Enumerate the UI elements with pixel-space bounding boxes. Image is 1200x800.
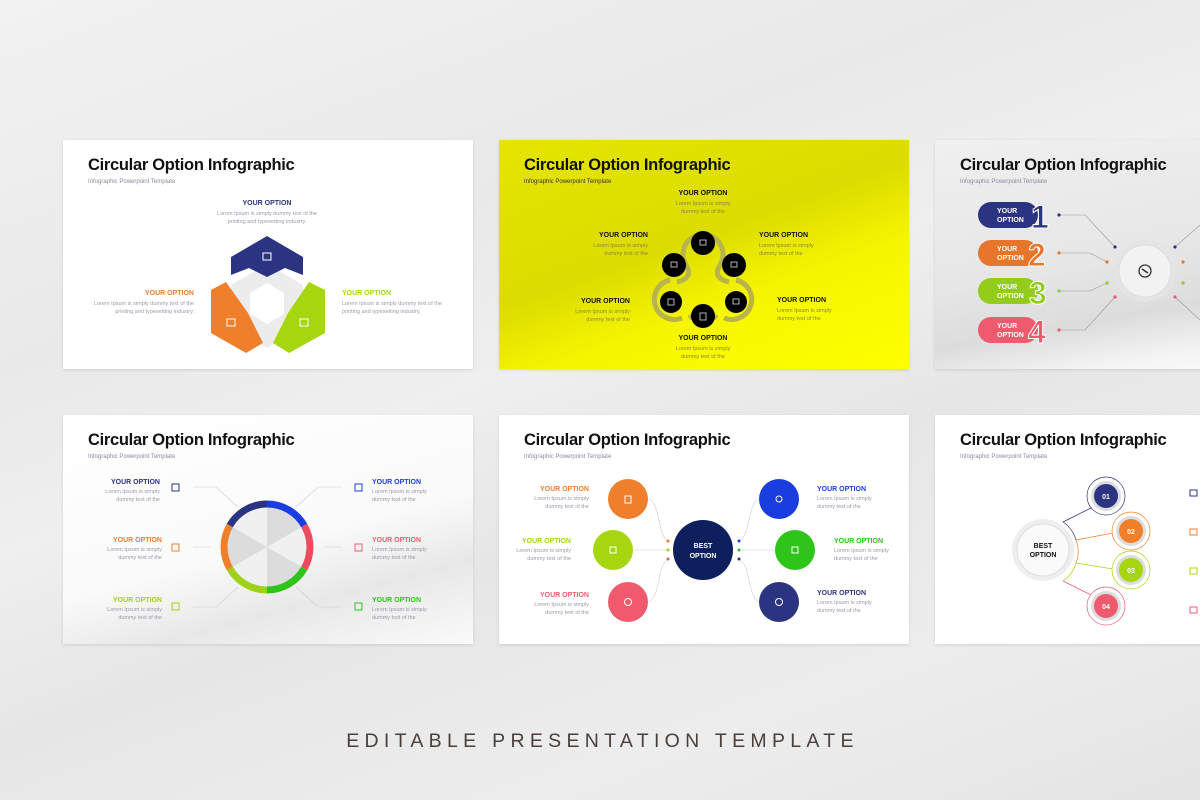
left labels: YOUR OPTION bbox=[111, 479, 160, 486]
left labels: Lorem Ipsum is simply bbox=[516, 548, 571, 554]
title: Circular Option Infographic bbox=[524, 156, 731, 174]
right labels: Lorem Ipsum is simply bbox=[834, 548, 889, 554]
left labels: dummy text of the bbox=[116, 497, 160, 503]
title bbox=[88, 431, 295, 460]
slide 6: numbered circles (cut off) bbox=[935, 415, 1200, 644]
title: Infographic Powerpoint Template bbox=[88, 179, 176, 185]
title bbox=[960, 156, 1167, 185]
option pills: OPTION bbox=[997, 217, 1024, 224]
option pills: 3 bbox=[1029, 275, 1047, 311]
option pills: 1 bbox=[1031, 199, 1049, 235]
right labels: YOUR OPTION bbox=[834, 538, 883, 545]
right labels: YOUR OPTION bbox=[817, 486, 866, 493]
center circle: BEST bbox=[694, 543, 713, 550]
dots bbox=[1057, 213, 1185, 332]
slide 1: hexagon options bbox=[63, 140, 473, 369]
connectors bbox=[1063, 507, 1113, 596]
connectors bbox=[193, 487, 341, 607]
left labels: YOUR OPTION bbox=[113, 537, 162, 544]
right labels: YOUR OPTION bbox=[817, 590, 866, 597]
right labels: dummy text of the bbox=[372, 615, 416, 621]
left option text: printing and typesetting industry. bbox=[115, 309, 194, 315]
option pills: YOUR bbox=[997, 246, 1017, 253]
title: Circular Option Infographic bbox=[960, 156, 1167, 174]
left labels bbox=[516, 486, 589, 616]
right option text bbox=[342, 290, 442, 315]
left labels: Lorem Ipsum is simply bbox=[105, 489, 160, 495]
option texts: dummy text of the bbox=[681, 209, 725, 215]
hexagon diagram bbox=[211, 236, 325, 353]
slide 3: numbered options (cut off) bbox=[935, 140, 1200, 369]
left labels: dummy text of the bbox=[545, 610, 589, 616]
right labels: Lorem Ipsum is simply bbox=[372, 547, 427, 553]
title: Circular Option Infographic bbox=[960, 431, 1167, 449]
top option text bbox=[217, 200, 317, 225]
title: Infographic Powerpoint Template bbox=[960, 454, 1048, 460]
title bbox=[960, 431, 1167, 460]
right labels: Lorem Ipsum is simply bbox=[372, 489, 427, 495]
left labels: YOUR OPTION bbox=[522, 538, 571, 545]
option texts: Lorem Ipsum is simply bbox=[777, 308, 832, 314]
left labels: dummy text of the bbox=[527, 556, 571, 562]
left labels: dummy text of the bbox=[118, 615, 162, 621]
option texts: Lorem Ipsum is simply bbox=[759, 243, 814, 249]
option pills: 4 bbox=[1028, 314, 1046, 350]
left labels: YOUR OPTION bbox=[113, 597, 162, 604]
option texts: dummy text of the bbox=[604, 251, 648, 257]
option texts: YOUR OPTION bbox=[599, 232, 648, 239]
option pills: 2 bbox=[1028, 237, 1046, 273]
title: Circular Option Infographic bbox=[88, 431, 295, 449]
right labels: dummy text of the bbox=[834, 556, 878, 562]
option texts: Lorem Ipsum is simply bbox=[593, 243, 648, 249]
option pills bbox=[978, 199, 1049, 350]
option pills: OPTION bbox=[997, 293, 1024, 300]
title: Infographic Powerpoint Template bbox=[960, 179, 1048, 185]
right labels: dummy text of the bbox=[817, 504, 861, 510]
slide 5: best option mind map bbox=[499, 415, 909, 644]
title: Circular Option Infographic bbox=[88, 156, 295, 174]
left labels: Lorem Ipsum is simply bbox=[107, 547, 162, 553]
right option text: Lorem Ipsum is simply dummy text of the bbox=[342, 301, 442, 307]
dots bbox=[666, 540, 740, 560]
right labels: Lorem Ipsum is simply bbox=[817, 496, 872, 502]
right labels bbox=[817, 486, 889, 614]
right labels: YOUR OPTION bbox=[372, 537, 421, 544]
right labels: dummy text of the bbox=[372, 497, 416, 503]
trefoil diagram bbox=[654, 231, 752, 328]
left labels: YOUR OPTION bbox=[540, 592, 589, 599]
right labels: Lorem Ipsum is simply bbox=[372, 607, 427, 613]
option texts: dummy text of the bbox=[759, 251, 803, 257]
option texts: YOUR OPTION bbox=[759, 232, 808, 239]
title: Circular Option Infographic bbox=[524, 431, 731, 449]
option pills: YOUR bbox=[997, 284, 1017, 291]
best option circle bbox=[1012, 519, 1074, 581]
title: Infographic Powerpoint Template bbox=[88, 454, 176, 460]
numbered circles: 04 bbox=[1102, 604, 1110, 611]
title bbox=[524, 431, 731, 460]
footer caption: EDITABLE PRESENTATION TEMPLATE bbox=[346, 730, 859, 752]
right labels: YOUR OPTION bbox=[372, 479, 421, 486]
title: Infographic Powerpoint Template bbox=[524, 454, 612, 460]
title: Infographic Powerpoint Template bbox=[524, 179, 612, 185]
right labels: dummy text of the bbox=[817, 608, 861, 614]
option texts bbox=[575, 190, 832, 360]
option pills: OPTION bbox=[997, 332, 1024, 339]
option texts: Lorem Ipsum is simply bbox=[676, 201, 731, 207]
option texts: YOUR OPTION bbox=[678, 190, 728, 197]
left option text bbox=[94, 290, 194, 315]
right labels: YOUR OPTION bbox=[372, 597, 421, 604]
left option text: YOUR OPTION bbox=[145, 290, 194, 297]
right option text: YOUR OPTION bbox=[342, 290, 391, 297]
best option circle: OPTION bbox=[1030, 552, 1056, 559]
left labels: dummy text of the bbox=[545, 504, 589, 510]
numbered circles: 02 bbox=[1127, 529, 1135, 536]
slide 4: ring options bbox=[63, 415, 473, 644]
right labels: Lorem Ipsum is simply bbox=[817, 600, 872, 606]
option circles bbox=[593, 479, 815, 622]
center circle: OPTION bbox=[690, 553, 716, 560]
option texts: YOUR OPTION bbox=[581, 298, 630, 305]
option pills: YOUR bbox=[997, 208, 1017, 215]
option pills: YOUR bbox=[997, 323, 1017, 330]
right labels bbox=[372, 479, 427, 621]
numbered circles bbox=[1087, 477, 1150, 625]
numbered circles: 03 bbox=[1127, 568, 1135, 575]
option texts: dummy text of the bbox=[777, 316, 821, 322]
left labels: Lorem Ipsum is simply bbox=[107, 607, 162, 613]
connector lines bbox=[1059, 215, 1200, 330]
best option circle: BEST bbox=[1034, 543, 1053, 550]
option texts: Lorem Ipsum is simply bbox=[676, 346, 731, 352]
title bbox=[88, 156, 295, 185]
top option text: YOUR OPTION bbox=[242, 200, 292, 207]
option texts: YOUR OPTION bbox=[678, 335, 728, 342]
left labels: YOUR OPTION bbox=[540, 486, 589, 493]
option pills: OPTION bbox=[997, 255, 1024, 262]
icons bbox=[172, 484, 362, 610]
connectors bbox=[634, 499, 774, 602]
ring chart bbox=[224, 504, 310, 590]
right option text: printing and typesetting industry. bbox=[342, 309, 421, 315]
option texts: YOUR OPTION bbox=[777, 297, 826, 304]
option texts: dummy text of the bbox=[681, 354, 725, 360]
left option text: Lorem Ipsum is simply dummy text of the bbox=[94, 301, 194, 307]
center circle bbox=[1114, 240, 1176, 302]
left labels: dummy text of the bbox=[118, 555, 162, 561]
option texts: dummy text of the bbox=[586, 317, 630, 323]
center circle bbox=[673, 520, 733, 580]
left labels: Lorem Ipsum is simply bbox=[534, 602, 589, 608]
numbered circles: 01 bbox=[1102, 494, 1110, 501]
left labels bbox=[105, 479, 162, 621]
left labels: Lorem Ipsum is simply bbox=[534, 496, 589, 502]
option texts: Lorem Ipsum is simply bbox=[575, 309, 630, 315]
title bbox=[524, 156, 731, 185]
right labels: dummy text of the bbox=[372, 555, 416, 561]
slide 2: yellow trefoil bbox=[499, 140, 909, 369]
side icons bbox=[1190, 490, 1197, 613]
top option text: Lorem Ipsum is simply dummy text of the bbox=[217, 211, 317, 217]
top option text: printing and typesetting industry. bbox=[228, 219, 307, 225]
